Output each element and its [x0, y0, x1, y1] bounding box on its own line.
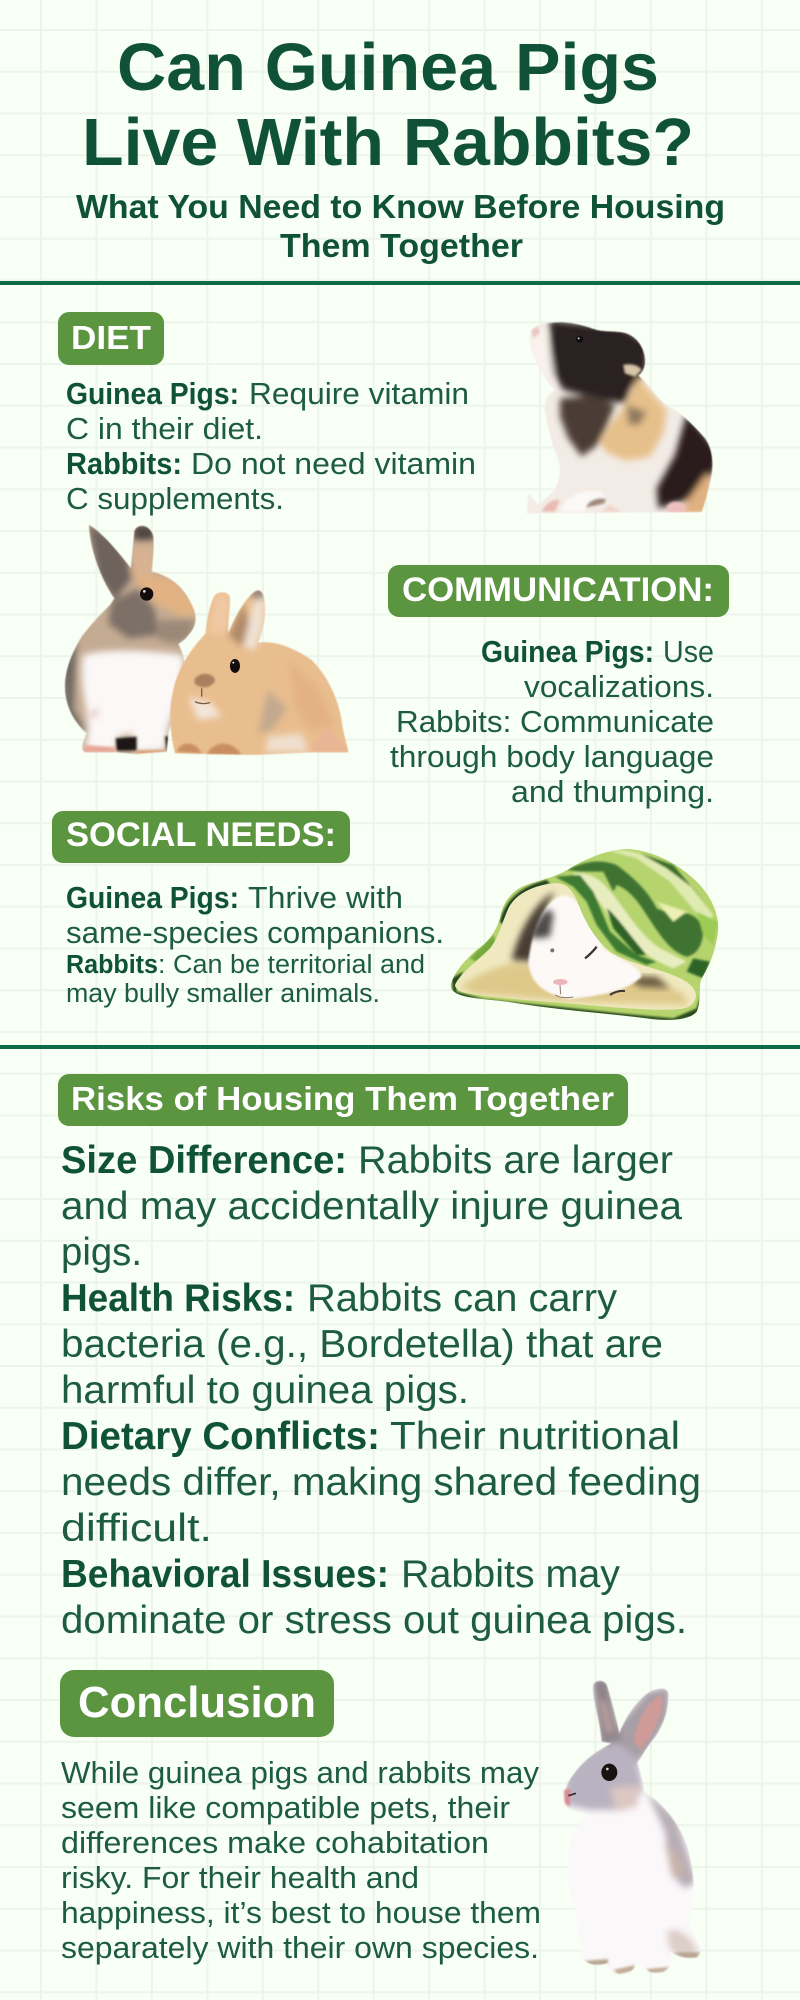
- text block: dietary conflicts: [61, 1415, 701, 1550]
- title: [82, 30, 694, 180]
- text block: communication: Use: [663, 635, 714, 669]
- text block: dietary conflicts: difficult.: [61, 1507, 212, 1550]
- text block: behavioral issues: Behavioral Issues:: [61, 1553, 389, 1596]
- text block: communication: vocalizations.: [524, 670, 714, 704]
- text block: communication: Rabbits: Communicate: [396, 705, 714, 739]
- text block: behavioral issues: dominate or stress out guinea pigs.: [61, 1599, 687, 1642]
- text block: conclusion: [61, 1756, 541, 1965]
- heading: diet pill: [58, 312, 164, 365]
- subtitle: Them Together: [280, 228, 523, 265]
- panel: diet: [58, 312, 720, 517]
- image: two rabbits: [62, 520, 352, 757]
- text block: conclusion: happiness, it’s best to house them: [61, 1896, 541, 1930]
- text block: behavioral issues: [61, 1553, 687, 1642]
- text block: health risks: harmful to guinea pigs.: [61, 1369, 469, 1412]
- heading: diet pill: DIET: [71, 319, 151, 356]
- text block: communication: [390, 635, 714, 809]
- image: guinea pig in fleece tunnel: [447, 845, 723, 1025]
- heading: conclusion pill: [60, 1670, 334, 1737]
- subtitle: [76, 189, 725, 265]
- text block: diet: C supplements.: [66, 482, 284, 516]
- text block: diet: Do not need vitamin: [191, 447, 476, 481]
- text block: conclusion: risky. For their health and: [61, 1861, 419, 1895]
- text block: health risks: Rabbits can carry: [307, 1277, 618, 1320]
- panel: risks: [58, 1074, 701, 1642]
- text block: health risks: bacteria (e.g., Bordetella) that are: [61, 1323, 663, 1366]
- text block: size difference: and may accidentally injure guinea: [61, 1185, 682, 1228]
- text block: communication: and thumping.: [511, 775, 714, 809]
- text block: dietary conflicts: Dietary Conflicts:: [61, 1415, 380, 1458]
- text block: conclusion: seem like compatible pets, their: [61, 1791, 510, 1825]
- text block: diet: Guinea Pigs:: [66, 377, 239, 411]
- panel: communication: [62, 520, 729, 809]
- text block: behavioral issues: Rabbits may: [401, 1553, 621, 1596]
- text block: conclusion: separately with their own species.: [61, 1931, 539, 1965]
- text block: social needs: [66, 881, 444, 1008]
- text block: communication: through body language: [390, 740, 714, 774]
- text block: dietary conflicts: needs differ, making shared feeding: [61, 1461, 701, 1504]
- heading: risks pill: [58, 1074, 628, 1126]
- text block: size difference: Size Difference:: [61, 1139, 347, 1182]
- heading: conclusion pill: Conclusion: [78, 1678, 316, 1727]
- text block: social needs: may bully smaller animals.: [66, 980, 380, 1008]
- heading: risks pill: Risks of Housing Them Together: [71, 1081, 614, 1118]
- text block: size difference: Rabbits are larger: [358, 1139, 673, 1182]
- heading: social needs pill: SOCIAL NEEDS:: [66, 816, 336, 854]
- heading: communication pill: COMMUNICATION:: [402, 571, 714, 609]
- text block: health risks: Health Risks:: [61, 1277, 295, 1320]
- text block: conclusion: While guinea pigs and rabbits may: [61, 1756, 540, 1790]
- image: guinea pig: [523, 317, 720, 517]
- text block: communication: Guinea Pigs:: [481, 635, 654, 669]
- text block: diet: Rabbits:: [66, 447, 182, 481]
- text block: diet: C in their diet.: [66, 412, 263, 446]
- panel: social needs: [52, 811, 723, 1025]
- text block: social needs: : Can be territorial and: [158, 951, 425, 979]
- text block: social needs: Thrive with: [248, 881, 403, 915]
- text block: social needs: Guinea Pigs:: [66, 881, 239, 915]
- heading: social needs pill: [52, 811, 350, 863]
- title: Can Guinea Pigs: [117, 30, 659, 105]
- title: Live With Rabbits?: [82, 105, 694, 180]
- text block: size difference: pigs.: [61, 1231, 142, 1274]
- text block: health risks: [61, 1277, 663, 1412]
- text block: social needs: Rabbits: [66, 951, 158, 979]
- text block: diet: [66, 377, 476, 516]
- text block: social needs: same-species companions.: [66, 916, 444, 950]
- heading: communication pill: [388, 565, 729, 617]
- subtitle: What You Need to Know Before Housing: [76, 189, 725, 226]
- text block: size difference: [61, 1139, 682, 1274]
- text block: diet: Require vitamin: [249, 377, 469, 411]
- image: white and grey rabbit: [560, 1675, 707, 1978]
- text block: conclusion: differences make cohabitation: [61, 1826, 489, 1860]
- panel: conclusion: [60, 1670, 707, 1978]
- text block: dietary conflicts: Their nutritional: [390, 1415, 680, 1458]
